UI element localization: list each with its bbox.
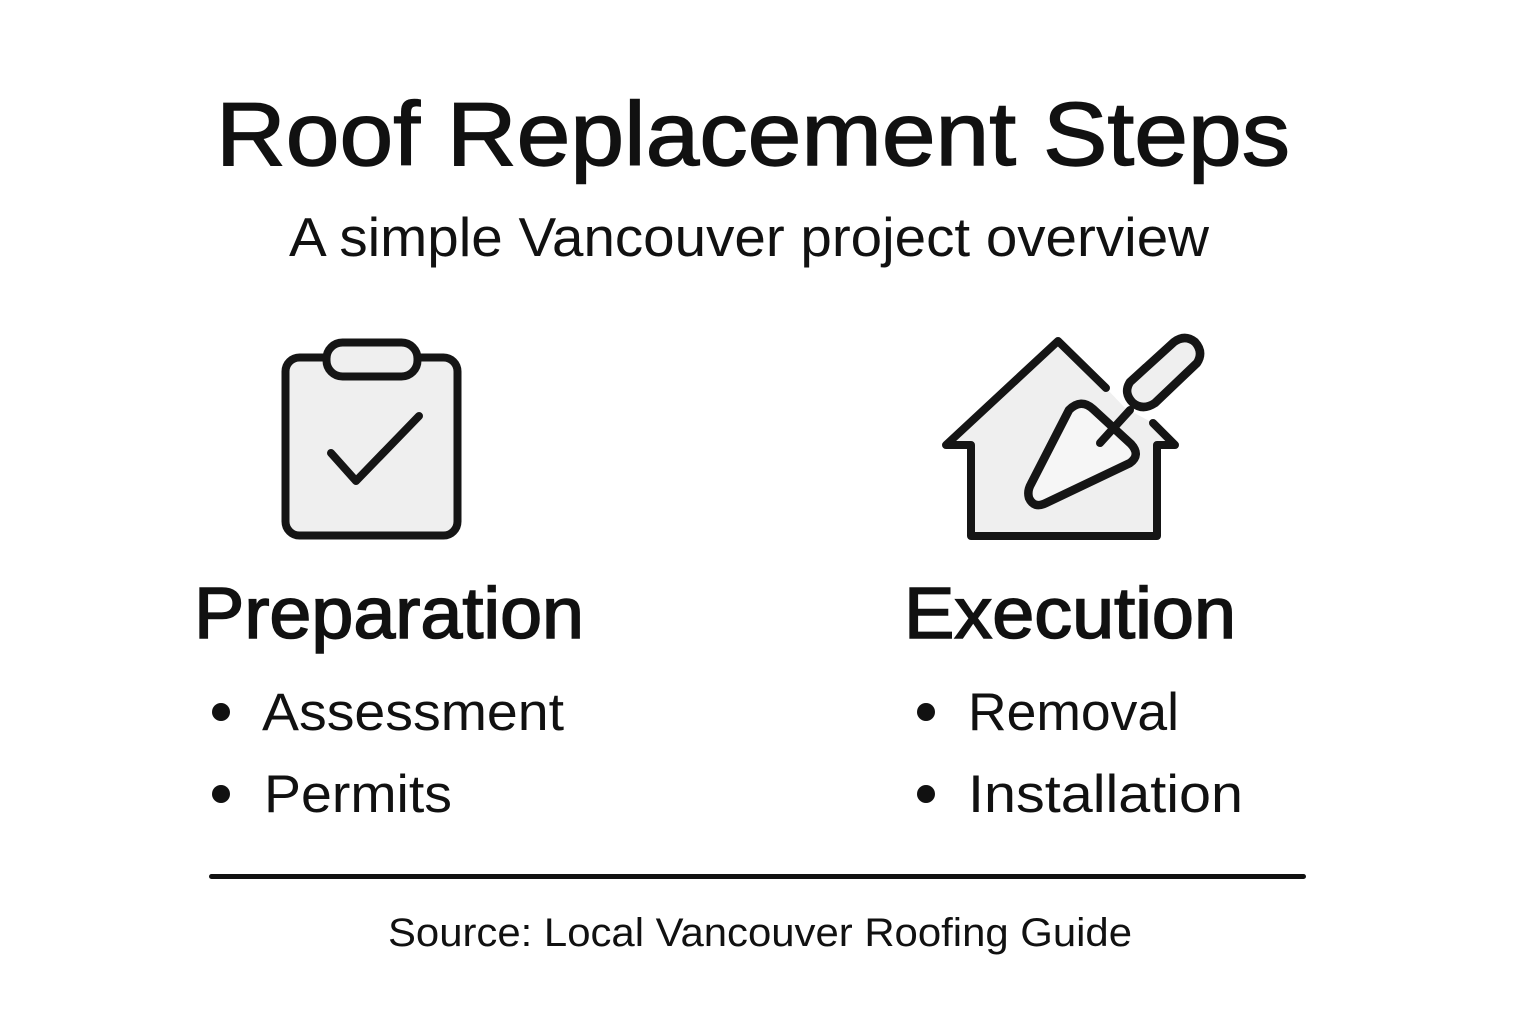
bullet list: preparation: Permits	[264, 765, 452, 824]
panel: execution	[904, 338, 1243, 824]
bullet list: preparation: Assessment	[262, 683, 564, 742]
bullet list: execution: Removal	[968, 683, 1179, 742]
bullet list: preparation	[212, 683, 564, 824]
subtitle: A simple Vancouver project overview	[289, 206, 1209, 268]
source note: Source: Local Vancouver Roofing Guide	[388, 911, 1132, 955]
title: Roof Replacement Steps	[216, 85, 1290, 185]
bullet list: execution	[917, 683, 1243, 824]
icon: house with trowel	[946, 338, 1200, 536]
panel: preparation	[194, 342, 584, 824]
bullet list: execution: Installation	[968, 765, 1243, 824]
heading: execution: Execution	[904, 574, 1236, 654]
icon: clipboard with checkmark	[286, 342, 458, 536]
heading: preparation: Preparation	[194, 574, 584, 654]
